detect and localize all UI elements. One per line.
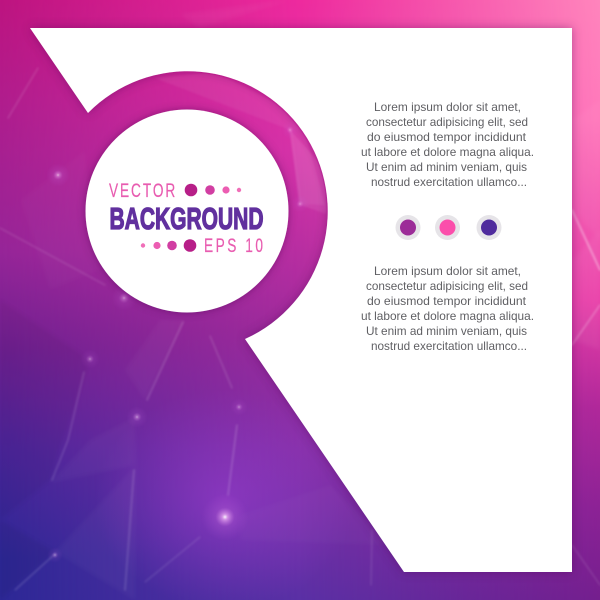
ring facets [155,72,327,213]
text block: upper paragraph: do eiusmod tempor incididunt [367,130,527,144]
heading: BACKGROUND: BACKGROUND [110,202,264,236]
heading: VECTOR: VECTOR [109,180,175,202]
text block: upper paragraph: Ut enim ad minim veniam, quis [366,160,527,174]
text block: upper paragraph [361,100,534,189]
text block: upper paragraph: nostrud exercitation ullamco... [371,175,527,189]
white title circle [86,110,288,312]
sparkles [201,493,249,541]
text block: lower paragraph: ut labore et dolore magna aliqua. [361,309,534,323]
text block: lower paragraph: Ut enim ad minim veniam, quis [366,324,527,338]
text block: lower paragraph: do eiusmod tempor incididunt [367,294,527,308]
text block: lower paragraph: Lorem ipsum dolor sit amet, [374,264,521,278]
dots row above title [185,184,241,196]
heading: EPS 10: EPS 10 [204,235,263,257]
text block: upper paragraph: consectetur adipisicing elit, sed [366,115,528,129]
text block: lower paragraph: consectetur adipisicing elit, sed [366,279,528,293]
text block: lower paragraph [361,264,534,353]
dots row below title [141,239,196,252]
text block: upper paragraph: ut labore et dolore magna aliqua. [361,145,534,159]
colour dots [396,215,502,240]
text block: upper paragraph: Lorem ipsum dolor sit amet, [374,100,521,114]
text block: lower paragraph: nostrud exercitation ullamco... [371,339,527,353]
